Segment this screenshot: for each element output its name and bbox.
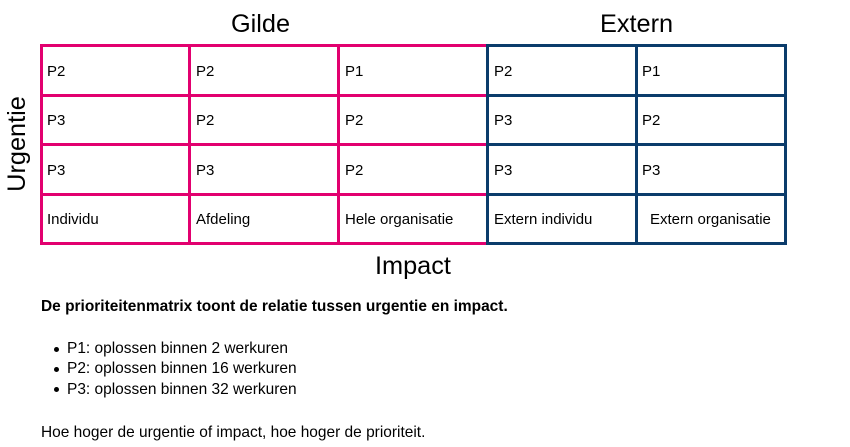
panel: Extern grid — [486, 44, 787, 245]
priority matrix: P3 — [642, 162, 660, 179]
priority matrix: Extern individu — [494, 211, 592, 228]
heading: Gilde: Gilde — [231, 10, 290, 38]
text: closing note: Hoe hoger de urgentie of impact, hoe hoger de prioriteit. — [41, 424, 425, 441]
list: priority response times: P2: oplossen binnen 16 werkuren — [67, 360, 297, 377]
axis label: Impact: Impact — [375, 252, 451, 280]
priority matrix: Afdeling — [196, 211, 250, 228]
priority matrix: P3 — [196, 162, 214, 179]
priority matrix — [40, 44, 787, 245]
priority matrix: Extern organisatie — [650, 211, 771, 228]
priority matrix: P1 — [345, 63, 363, 80]
priority matrix: P3 — [47, 162, 65, 179]
priority matrix: P3 — [47, 112, 65, 129]
priority matrix: Hele organisatie — [345, 211, 453, 228]
priority matrix: P2 — [494, 63, 512, 80]
list: priority response times: P1: oplossen binnen 2 werkuren — [67, 340, 288, 357]
list: priority response times: P3: oplossen binnen 32 werkuren — [67, 381, 297, 398]
list: priority response times — [54, 340, 297, 398]
panel: Gilde grid — [40, 44, 486, 245]
priority matrix: P2 — [642, 112, 660, 129]
priority matrix: P3 — [494, 112, 512, 129]
priority matrix: P3 — [494, 162, 512, 179]
priority matrix: Individu — [47, 211, 99, 228]
priority matrix: P2 — [345, 112, 363, 129]
priority matrix: P2 — [345, 162, 363, 179]
priority matrix: P2 — [196, 63, 214, 80]
heading: Extern: Extern — [600, 10, 673, 38]
priority matrix: P1 — [642, 63, 660, 80]
priority matrix: P2 — [196, 112, 214, 129]
text: matrix intro: De prioriteitenmatrix toont de relatie tussen urgentie en impact. — [41, 298, 508, 315]
axis label: Urgentie: Urgentie — [3, 96, 31, 192]
priority matrix: P2 — [47, 63, 65, 80]
